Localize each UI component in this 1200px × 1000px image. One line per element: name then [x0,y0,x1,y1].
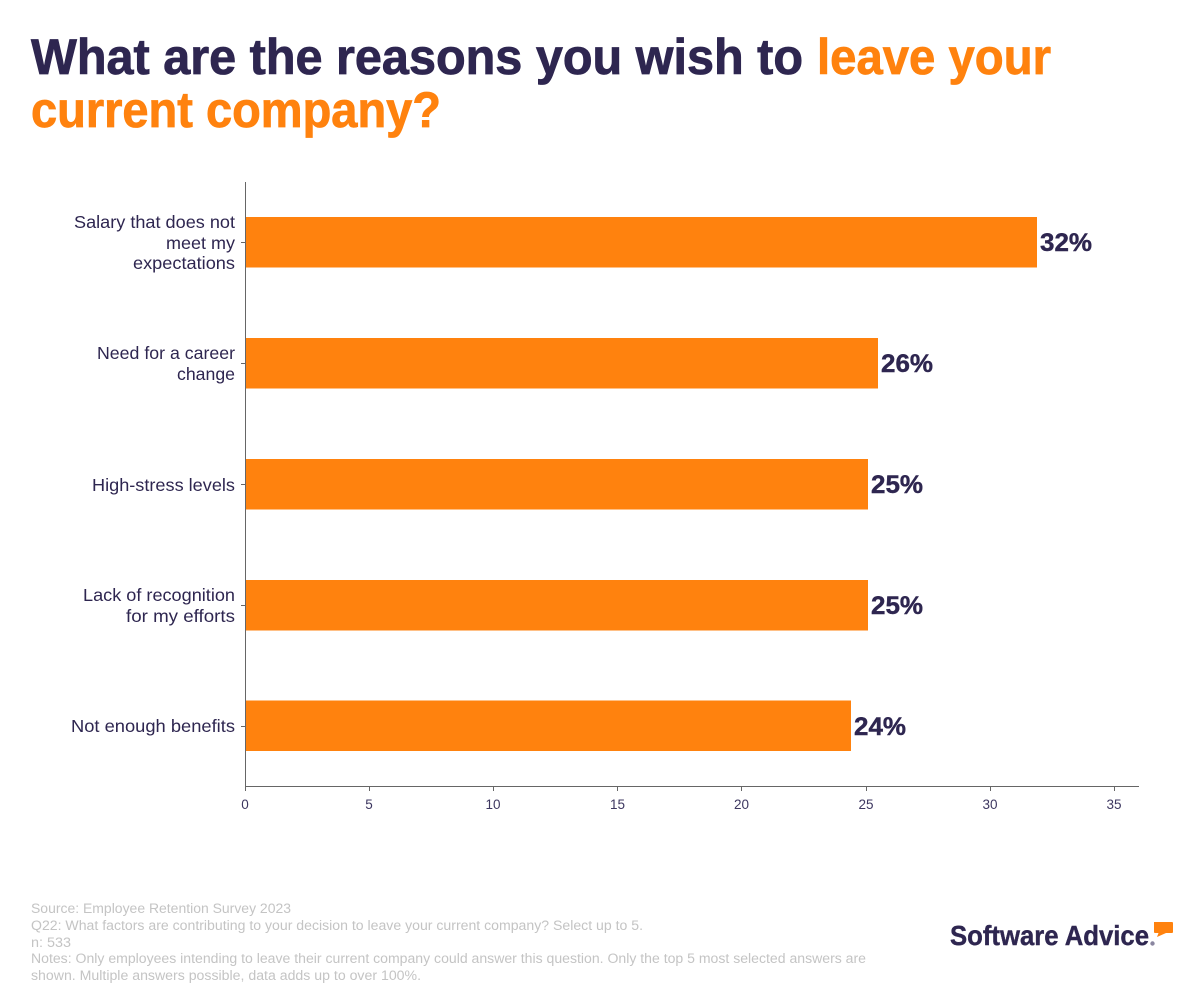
logo: Software Advice: Software Advice [950,920,1149,951]
category labels: Salary that does not [74,212,235,232]
category labels: expectations [133,253,235,273]
source notes: Notes: Only employees intending to leave their current company could answer this question. Only the top 5 most selected answers are [31,951,866,966]
source notes: shown. Multiple answers possible, data adds up to over 100%. [31,968,421,983]
x axis labels: 10 [485,797,501,812]
axes [241,182,1139,791]
icon: speech bubble [1154,922,1173,937]
x axis labels: 30 [982,797,998,812]
value labels: 25% [871,471,923,499]
value labels [854,229,1092,741]
x axis labels: 0 [241,797,249,812]
source notes: Source: Employee Retention Survey 2023 [31,901,291,916]
category labels [71,212,235,736]
x axis labels: 25 [858,797,874,812]
x axis labels: 20 [734,797,749,812]
category labels: meet my [166,233,235,253]
value labels: 32% [1040,229,1092,257]
category labels: High-stress levels [92,475,235,495]
title [31,29,1051,138]
title: leave your [817,29,1051,85]
category labels: Need for a career [97,343,235,363]
x axis labels: 35 [1106,797,1122,812]
x axis labels: 5 [365,797,373,812]
category labels: for my efforts [126,606,235,626]
title: current company? [31,82,441,138]
category labels: Not enough benefits [71,716,235,736]
registered mark [1150,941,1155,946]
x axis labels: 15 [610,797,625,812]
category labels: change [177,364,235,384]
value labels: 25% [871,592,923,620]
value labels: 26% [881,350,933,378]
x axis labels [241,797,1122,812]
source notes [31,901,866,983]
title: What are the reasons you wish to [31,29,803,85]
source notes: Q22: What factors are contributing to your decision to leave your current company? Select up to 5. [31,918,643,933]
bars [245,217,1037,751]
category labels: Lack of recognition [83,585,235,605]
value labels: 24% [854,713,906,741]
source notes: n: 533 [31,935,71,950]
bar chart [71,182,1139,812]
